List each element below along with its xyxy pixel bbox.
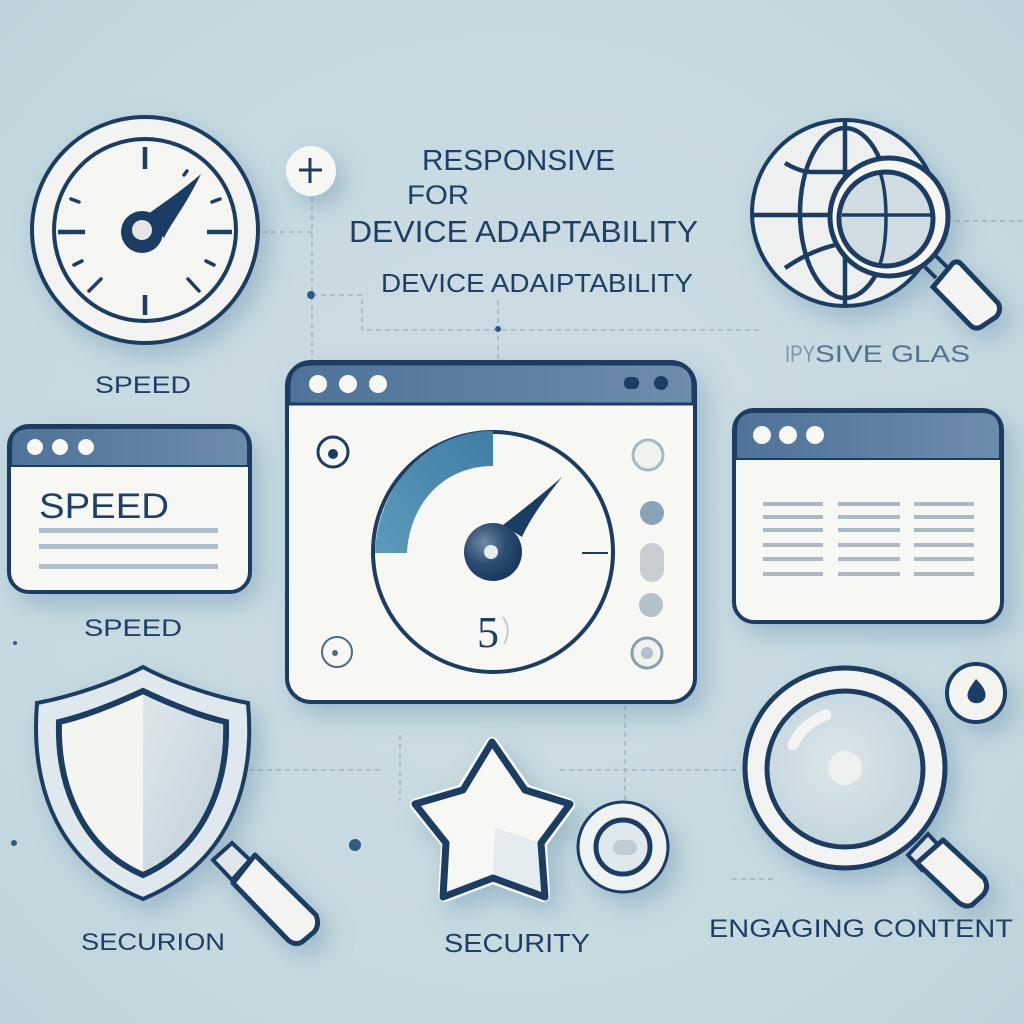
label: responsive glass: SIVE GLAS bbox=[815, 341, 970, 368]
label: security: SECURITY bbox=[444, 928, 590, 958]
panel: speed browser window: SPEED bbox=[39, 487, 169, 526]
label: security: SECURION bbox=[81, 929, 225, 956]
badge: small flame bbox=[947, 664, 1005, 722]
title: DEVICE ADAPTABILITY bbox=[349, 214, 698, 249]
title: DEVICE ADAIPTABILITY bbox=[381, 268, 693, 298]
panel: speed browser window bbox=[9, 426, 250, 592]
label: speed: SPEED bbox=[84, 615, 182, 642]
connector dots bbox=[11, 291, 501, 851]
title: FOR bbox=[407, 180, 469, 210]
label: engaging content: ENGAGING CONTENT bbox=[709, 915, 1013, 943]
plus badge bbox=[286, 146, 336, 196]
connector lines bbox=[240, 197, 1024, 879]
icon: shield with magnifier bbox=[36, 667, 318, 944]
icon: speed gauge bbox=[32, 117, 258, 343]
label: speed: SPEED bbox=[95, 372, 191, 399]
icon: globe with magnifier bbox=[752, 120, 1000, 328]
label: responsive glass bbox=[785, 341, 970, 368]
label: responsive glass: IPY bbox=[785, 341, 815, 368]
icon: star bbox=[415, 742, 570, 897]
panel: table browser window bbox=[734, 410, 1002, 622]
central gauge: 5 bbox=[477, 608, 499, 657]
side controls bbox=[318, 437, 664, 668]
title bbox=[349, 145, 698, 298]
icon: magnifying glass bbox=[745, 668, 987, 906]
panel: central browser window bbox=[287, 362, 695, 702]
icon: toggle badge bbox=[578, 802, 668, 892]
title: RESPONSIVE bbox=[422, 145, 615, 177]
central gauge bbox=[373, 431, 613, 672]
